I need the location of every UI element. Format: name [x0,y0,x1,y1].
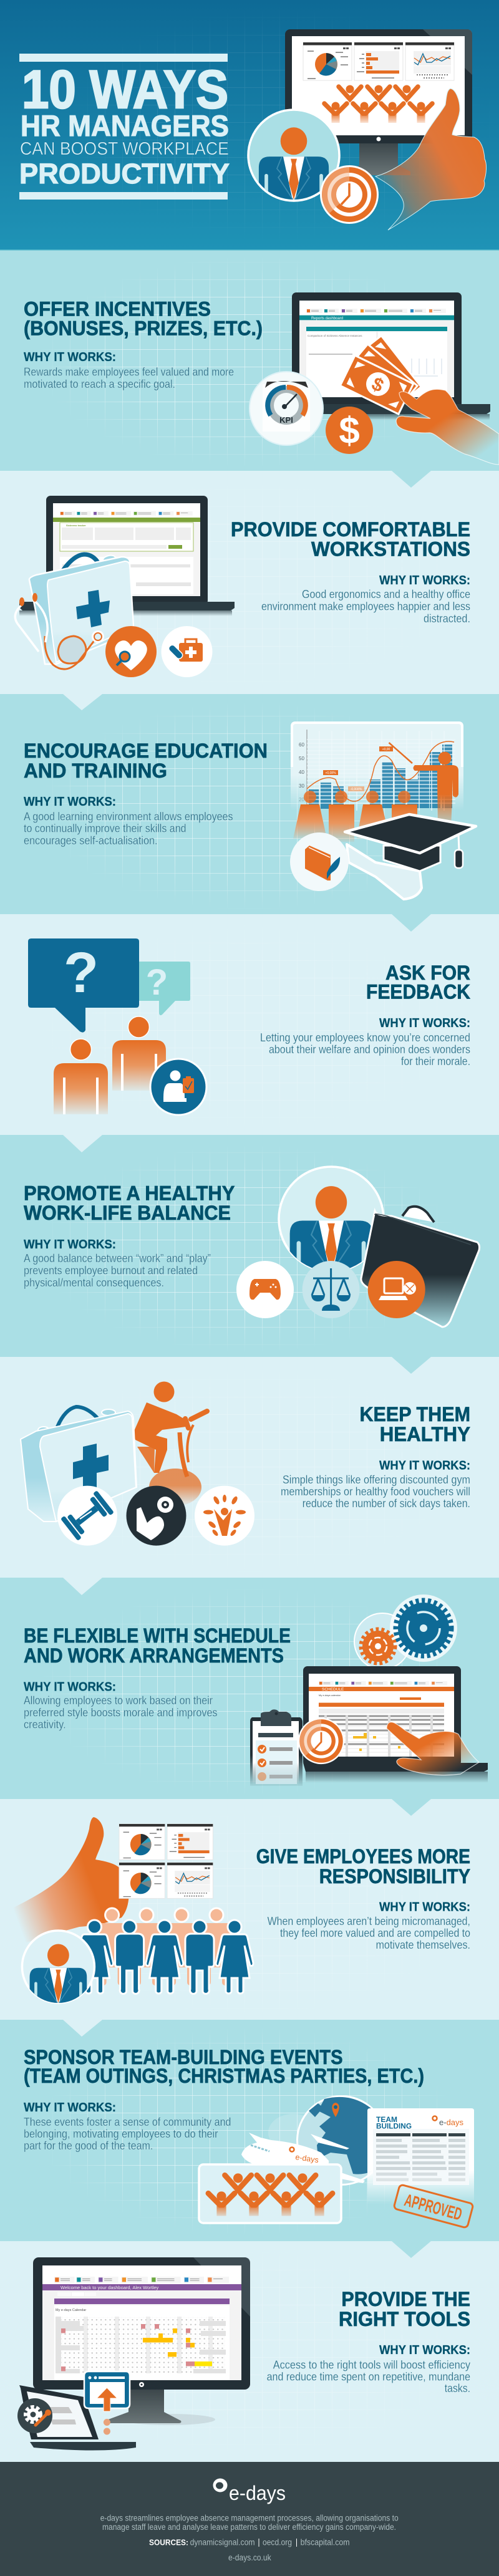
icon: airplane [241,2133,365,2183]
icon: healthy tree [195,1486,254,1546]
approved stamp [394,2184,473,2228]
heading: SPONSOR TEAM-BUILDING EVENTS [24,2046,343,2068]
why it works text: WHY IT WORKS: [24,1237,116,1252]
icon: gears [354,1594,457,1669]
panel: work-life balance [24,1167,480,1327]
why it works text: preferred style boosts morale and improves [24,1706,217,1719]
heading: PROVIDE THE [341,2288,470,2310]
heading: PROVIDE COMFORTABLE [231,518,470,541]
panel: offer incentives [24,292,499,465]
why it works text: Simple things like offering discounted gym [283,1473,470,1486]
why it works text: Good ergonomics and a healthy office [302,587,470,601]
heading: AND TRAINING [24,760,167,782]
chart board with teacher: 60 [299,742,304,748]
icon: heart check [105,626,157,677]
chart board with teacher: 40 [299,769,304,775]
heading [231,518,470,561]
sources: SOURCES: [149,2539,188,2547]
people box [199,2164,341,2223]
why it works text [24,350,234,390]
footer text: manage staff leave and analyse leave patterns to deliver efficiency gains company-wide. [102,2522,396,2532]
laptop with reports dashboard: Reports dashboard [311,317,343,321]
heading [339,2288,470,2330]
logo: e-days [213,2478,286,2504]
why it works text: reduce the number of sick days taken. [303,1497,470,1510]
employees group [76,1908,253,1994]
icon: upload window [84,2371,130,2434]
speech bubble large [28,938,139,1033]
title: CAN BOOST WORKPLACE [20,139,229,159]
exercise bike rider [133,1382,207,1506]
icon: gear and wrench [17,2398,52,2433]
icon: scales [303,1261,360,1318]
why it works text: WHY IT WORKS: [24,1679,116,1694]
why it works text: WHY IT WORKS: [24,350,116,364]
icon: kpi gauge: KPI [279,415,293,425]
why it works text: WHY IT WORKS: [379,1899,470,1914]
monitor with calendar [33,2257,250,2425]
chart board with teacher: 50 [299,756,304,761]
why it works text: environment make employees happier and less [261,600,470,612]
title [19,54,230,200]
heading [24,298,263,340]
heading: HEALTHY [380,1423,470,1445]
team building document: e-days [439,2118,464,2127]
manager portrait [248,110,339,201]
heading [24,1182,235,1224]
why it works text [267,2343,471,2395]
footer text [100,2514,399,2532]
heading: KEEP THEM [359,1403,470,1425]
icon: graduation cap [345,814,476,871]
why it works text: WHY IT WORKS: [379,1459,470,1473]
report panels [119,1824,213,1898]
chart board with teacher: +0,08% [325,771,336,775]
laptop with schedule [303,1666,488,1783]
panel: team-building events [24,2046,474,2228]
title: HR MANAGERS [21,109,229,142]
why it works text: tasks. [445,2381,470,2395]
icon: first aid case [21,1407,137,1522]
why it works text: WHY IT WORKS: [379,1016,470,1030]
logo: e-days: e-days [229,2482,286,2504]
heading [24,2046,424,2087]
why it works text: WHY IT WORKS: [379,573,470,587]
heading: ENCOURAGE EDUCATION [24,740,268,762]
why it works text: prevents employee burnout and related [24,1264,198,1277]
laptop with sickness form: Sickness tracker [66,524,86,527]
laptop left [19,2385,136,2451]
why it works text: about their welfare and opinion does wonders [269,1043,470,1056]
why it works text [24,794,233,847]
why it works text: encourages self-actualisation. [24,834,157,847]
team building document [367,2108,474,2204]
chart board with teacher [291,721,463,811]
why it works text: they feel more valued and are compelled to [280,1926,470,1939]
heading: RIGHT TOOLS [339,2308,470,2330]
why it works text [268,1899,470,1951]
why it works text: memberships or healthy food vouchers will [281,1485,470,1498]
heading: GIVE EMPLOYEES MORE [256,1845,470,1868]
icon: airplane: e-days [295,2153,319,2164]
icon: globe [268,2096,385,2185]
website: e-days.co.uk [228,2553,271,2562]
heading [24,1624,291,1667]
panel: more responsibility [12,1817,470,2003]
why it works text: belonging, motivating employees to do their [24,2127,218,2140]
panel: education and training [24,721,476,899]
why it works text: creativity. [24,1718,66,1731]
icon: clock [298,1718,344,1764]
why it works text [24,2100,231,2152]
heading: BE FLEXIBLE WITH SCHEDULE [24,1624,291,1647]
why it works text: A good balance between “work” and “play” [24,1252,211,1265]
icon: dumbbell [57,1486,117,1546]
chart board with teacher: 20 [299,797,304,803]
teacher pointing [389,743,458,829]
why it works text [24,1679,217,1731]
heading: OFFER INCENTIVES [24,298,211,321]
thumbs-up hand [12,1817,129,1946]
chart board with teacher: -0,008% [351,788,362,791]
icon: kpi gauge [250,372,323,445]
monitor with calendar: Welcome back to your dashboard, Alex Wortley [61,2285,159,2290]
why it works text: motivate themselves. [375,1938,470,1951]
icon: diploma [347,844,422,899]
thumbs-up hand [375,89,487,230]
manager portrait [279,1167,384,1271]
heading: (BONUSES, PRIZES, ETC.) [24,317,263,340]
why it works text: WHY IT WORKS: [379,2343,470,2357]
heading [256,1845,470,1888]
why it works text [261,573,470,625]
sources: bfscapital.com [301,2538,350,2547]
icon: briefcase [361,1207,480,1327]
why it works text: for their morale. [401,1054,470,1068]
why it works text: Allowing employees to work based on their [24,1694,213,1707]
icon: laptop and ball [368,1261,425,1318]
icon: survey badge [150,1059,206,1115]
laptop with reports dashboard: Comparison of Sickness Absence Instances [308,334,362,337]
heading: AND WORK ARRANGEMENTS [24,1644,284,1667]
heading: WORK-LIFE BALANCE [24,1202,231,1224]
why it works text: When employees aren’t being micromanaged, [268,1914,470,1927]
icon: arm muscle [126,1486,186,1546]
title: 10 WAYS [22,60,228,120]
speech bubble large: ? [64,941,99,1005]
monitor with dashboard [285,29,472,175]
why it works text: motivated to reach a specific goal. [24,377,175,390]
laptop with reports dashboard [284,292,490,420]
laptop with schedule: My e-days calendar [319,1694,341,1697]
panel: comfortable workstations [15,496,470,677]
panel: footer [0,2462,499,2576]
panel: flexible schedule [24,1594,488,1786]
why it works text [260,1016,470,1068]
heading [366,962,470,1003]
manager portrait [22,1931,94,2003]
icon: money and hand: $ [369,374,387,397]
why it works text [24,1237,211,1289]
icon: dollar [326,407,373,454]
icon: clipboard [250,1709,303,1786]
heading [359,1403,470,1445]
why it works text: WHY IT WORKS: [24,794,116,809]
chart board with teacher: 30 [299,783,304,789]
speech bubble small: ? [146,962,168,1003]
sources: dynamicsignal.com [190,2538,255,2547]
panel: right tools [17,2257,471,2451]
title: PRODUCTIVITY [19,158,230,190]
why it works text: distracted. [424,612,470,625]
why it works text: to continually improve their skills and [24,822,186,835]
heading: ASK FOR [385,962,470,984]
panel: keep them healthy [21,1382,470,1546]
why it works text: WHY IT WORKS: [24,2100,116,2115]
sources [149,2538,350,2547]
why it works text: A good learning environment allows employees [24,809,233,823]
icon: money and hand [340,335,499,465]
why it works text: part for the good of the team. [24,2139,153,2152]
team building document: BUILDING [376,2123,412,2130]
panel: ask for feedback [28,938,470,1115]
heading: WORKSTATIONS [311,538,470,561]
icon: clock [320,165,379,224]
people asking [54,1016,166,1114]
chart board with teacher: +0,00 [382,748,390,751]
team building document: TEAM [376,2116,397,2124]
icon: pointing hand [387,1722,479,1775]
heading: PROMOTE A HEALTHY [24,1182,235,1205]
sources: oecd.org [263,2538,292,2547]
icon: medical kit [161,626,212,677]
footer text: e-days streamlines employee absence management processes, allowing organisations to [100,2514,399,2523]
why it works text: Access to the right tools will boost efficiency [273,2358,471,2371]
icon: game controller [236,1261,294,1318]
heading: RESPONSIBILITY [319,1865,470,1888]
group of learners [293,791,417,842]
icon: dollar: $ [339,410,360,451]
heading [24,740,268,782]
icon: first aid case and stethoscope [15,554,134,669]
speech bubble small [139,962,190,1015]
why it works text: Letting your employees know you’re concerned [260,1031,470,1044]
laptop with sickness form [19,496,235,616]
why it works text: and reduce time spent on repetitive, mundane [267,2370,470,2383]
why it works text: These events foster a sense of community and [24,2115,231,2128]
monitor with calendar: My e-days Calendar [56,2308,86,2312]
heading: (TEAM OUTINGS, CHRISTMAS PARTIES, ETC.) [24,2065,424,2087]
why it works text [281,1459,470,1510]
laptop with schedule: SCHEDULE [322,1687,344,1692]
icon: book and quill [290,832,349,891]
panel: header [0,0,499,249]
why it works text: physical/mental consequences. [24,1276,164,1289]
heading: FEEDBACK [366,981,470,1003]
why it works text: Rewards make employees feel valued and more [24,365,234,378]
